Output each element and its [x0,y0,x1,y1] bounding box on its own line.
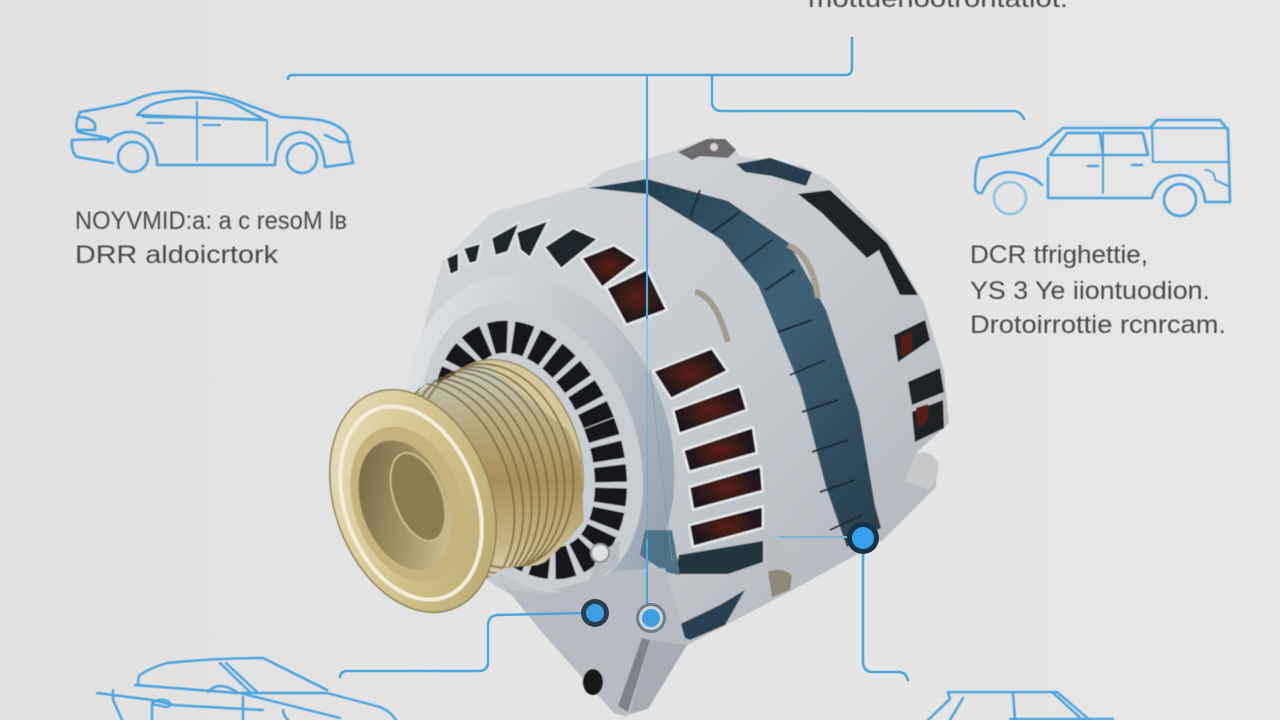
rear dark housing slots [736,158,812,186]
metal strap bends [695,292,728,342]
text block: left caption: NOYVMID:a: a c resoM lв [75,207,347,235]
ring shadow [640,530,680,575]
dark stator band [589,179,881,547]
stator lamination lines [690,190,862,530]
pulley front flange [300,366,526,636]
text block: right caption: DCR tfrighettie, [970,241,1148,269]
icon: car roof, cropped at bottom right [926,692,1113,720]
lower stator shoulder [675,541,763,574]
callout dot: pulley bracket [581,599,609,627]
rear fins [894,320,944,442]
lower mounting bracket [495,568,687,716]
icon: sedan car, upper left [72,91,353,173]
pulley grooves [328,358,584,614]
bracket bolt [591,544,609,562]
text block: left caption [75,207,347,269]
lug [766,536,793,597]
pulley bore [342,427,468,583]
mounting hole [583,669,603,695]
text block: right caption [970,241,1226,339]
icon: pickup truck, upper right [975,120,1230,216]
alternator illustration [300,137,949,716]
callout dot: stator [847,522,879,554]
mounting ear top [678,139,736,160]
text block: left caption: DRR aldoicrtork [75,241,279,269]
front housing windows [581,245,763,547]
text block: right caption: Drotoirrottie rcnrcam. [970,311,1226,339]
connector lines in front [340,75,908,680]
housing silhouette [414,137,949,716]
front ring [359,236,721,648]
text block: right caption: YS 3 Ye iiontuodion. [970,277,1210,305]
fan blades [419,313,641,587]
connector lines behind alternator [288,38,1024,119]
callout dot: lower bracket [636,603,666,633]
icon: coupe car, cropped at bottom left [97,658,397,720]
